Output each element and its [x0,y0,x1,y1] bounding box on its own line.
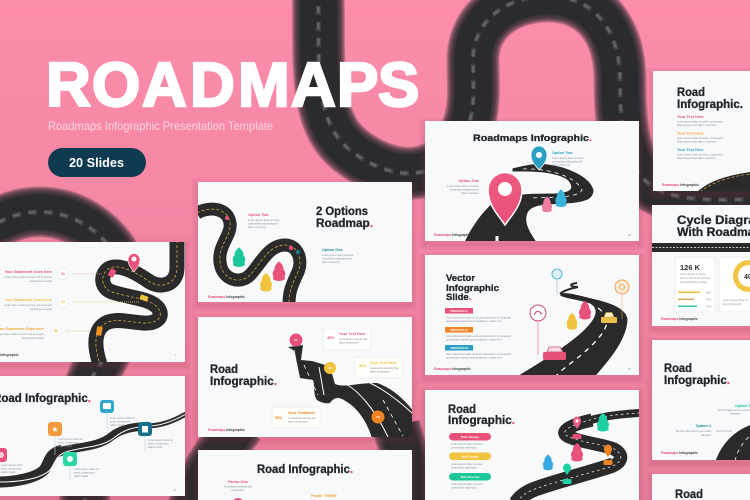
pill captions [451,442,483,490]
soft road: main winding road [318,0,750,200]
pill captions: consectetur adipiscing [451,486,477,490]
text items: adipiscing elit sed diam nonummy [677,156,717,160]
page number: 14 [173,488,176,492]
text items: Lorem ipsum dolor sit amet, consectetur [677,152,723,156]
title: Infographic. [677,99,743,111]
callout 45% pink: 45% [327,336,335,340]
statement 01 [4,270,52,283]
option 4: For the page dummy text used [676,429,712,433]
title [677,87,743,111]
title: 2 Options Roadmap: Roadmap. [316,218,373,230]
pill captions: Lorem ipsum dolor sit amet, [451,462,483,466]
donut card [719,257,750,312]
title: 2 Options Roadmap [316,206,373,230]
option one text: Lorem ipsum dolor sit amet, [447,184,479,188]
callout 50% yellow: A wonderful serenity has [370,366,399,370]
callout lines and text: adipis ingelit [58,444,73,448]
cars [543,312,617,360]
callout 65% orange [272,407,320,428]
option two text: consectetur adipiscing elit [248,222,278,226]
panel: Roadmaps Infographic pins slide [425,121,639,242]
title: Road [664,363,692,375]
connector [716,430,732,432]
pills: Web Design [461,454,479,458]
title: Vector [446,273,475,284]
text items: adipiscing elit sed diam nonummy [677,139,717,143]
title [448,404,515,427]
option two text [552,151,584,167]
road strip [652,243,750,252]
trees [542,190,567,212]
road: perspective [517,283,628,376]
icon: smile ring [552,269,562,294]
option two text: consectetur adipiscing elit [552,160,582,164]
option one text [322,248,354,264]
option one text: consectetur adipiscing elit [322,256,352,260]
callout 65% orange: Your Textliners [288,411,315,415]
title [446,273,499,303]
footer: Roadmaps Infographic [434,367,471,371]
stat card: 126 K [680,263,701,272]
number badges: 02 [61,300,65,304]
panel: right Road Infographic slide [653,71,750,192]
callout lines and text: Lorem ipsum dolor [1,463,23,467]
statement 01: Lorem ipsum dolor sit amet. Ius te tempor [4,275,52,279]
stat card [675,257,715,312]
option one text: Option One [458,179,479,183]
page number: 7 [175,353,177,357]
pill captions: consectetur adipiscing [451,466,477,470]
process tags: PROCESS 01 [450,309,468,313]
stat card: 80% [706,290,712,294]
pill captions: Lorem ipsum dolor sit amet, [451,442,483,446]
title: Infographic. [448,415,515,427]
milestones: 01 [294,338,298,342]
pills [449,433,491,480]
option two text: Lorem ipsum dolor sit amet, [248,218,280,222]
stat card: 75% [706,304,712,308]
title: Road Infographic: Infographic. [210,376,277,388]
title: Road [448,404,476,416]
factor one: possession [232,488,245,492]
text items: Your Text Here [677,148,703,152]
trees [567,301,591,330]
pin: option two [531,146,547,170]
option two text: diam nonummy [248,225,266,229]
process tags: Get a document made since into document. In consectet [446,352,511,356]
title: Infographic. [664,375,730,387]
option two text [248,213,280,229]
option one text: Option One [322,248,343,252]
option 3: standard [730,412,741,416]
text items: Your Text Here [677,115,703,119]
statement 02: Lorem ipsum dolor sit amet. Ius te tempor [4,303,52,307]
option one text [447,179,480,195]
donut card: Lorem ipsum dolor sit [723,298,748,302]
pin [128,254,140,272]
callout 50% yellow: 50% [359,364,367,368]
panel: right Road Infographic options slide [652,340,750,461]
title: Slide. [446,292,471,303]
title: Road [677,87,705,99]
statement 02 [4,298,52,311]
callout lines and text: adipis ingelit [148,445,163,449]
trees [543,413,609,470]
icon: gear ring [615,280,629,319]
callout 65% orange: taken possession [288,420,309,424]
number badges [50,268,68,336]
callout 50% yellow: taken possession [370,370,391,374]
soft road: lower left [0,212,118,500]
panel: statements road slide [0,240,185,364]
pills: Print Design [461,435,479,439]
panel: bottom right Road slide [652,474,750,500]
subtitle: Roadmaps Infographic Presentation Template [48,119,273,133]
option 3 [718,404,750,416]
callout lines and text: Lorem ipsum dolor sit [58,437,83,441]
callout lines and text: amet, consectetur [1,466,22,470]
panel: 2 Options Roadmap slide [197,182,412,304]
trees [233,248,285,292]
title: Roadmaps Infographic . [473,133,592,144]
road: perspective with pins [464,163,594,242]
option two text: diam nonummy [552,163,570,167]
option 3: Option 3 [735,404,750,408]
pill captions: consectetur adipiscing [451,446,477,450]
text items: Your Text Here [677,132,703,136]
callout lines and text: amet, consectetur [110,420,131,424]
icon tiles: ★ [51,425,59,434]
option 4: Option 4 [696,424,712,428]
number badges: 03 [54,329,58,333]
title [664,363,730,387]
statement 02: admodi per suscipit [30,307,52,311]
callout lines and text: amet, consectetur [74,470,95,474]
option one text: consectetur adipiscing elit [449,188,479,192]
option two text: Option Two [552,151,573,155]
panel: Road Infographic pills slide [425,390,640,500]
panel: Cycle Diagram slide [652,205,750,326]
callout lines and text [1,413,173,481]
option one text: Lorem ipsum dolor sit amet, [322,253,354,257]
process tags: PROCESS 02 [450,328,468,332]
road: perspective rising [288,345,414,438]
option one text: diam nonummy [461,191,480,195]
text items [677,115,723,160]
factor one: Factor One [228,480,248,484]
callout 45% pink: taken possession [339,340,360,344]
milestones: 02 [328,366,332,370]
panel: Road Infographic mountain road slide [198,317,414,438]
dotted connectors [66,274,140,331]
stat card: 70% [706,298,712,302]
panel: Vector Infographic slide [425,255,639,376]
road [715,424,750,461]
callout lines and text: amet, consectetur [58,440,79,444]
icon: headphones ring [530,305,546,355]
road [516,413,640,500]
milestones [290,334,384,424]
option one text: diam nonummy [322,260,340,264]
text items: Lorem ipsum dolor sit amet, consectetur [677,136,723,140]
panel: Road Infographic factors slide [198,450,412,500]
statement 01: admodi per suscipit [30,279,52,283]
icon tiles [0,400,152,466]
text items: Lorem ipsum dolor sit amet, consectetur [677,120,723,124]
page number: 12 [628,367,631,371]
stat card: and typesetting industry [680,280,708,284]
option 4 [676,424,712,437]
process tags: accusantium doloremque laudantium, totam rem [446,356,502,360]
callout 65% orange: 65% [275,416,283,420]
process tags: Get a document made since into document. In consectet [446,334,511,338]
pin: option one [488,172,522,225]
road [697,172,750,192]
callout lines and text: adipis ingelit [110,423,125,427]
process tags: accusantium doloremque laudantium, totam rem [446,319,502,323]
callout 45% pink: Your Text Here [339,332,365,336]
stat card: Lorem ipsum is simply [680,272,706,276]
road [96,240,177,364]
text items: adipiscing elit sed diam nonummy [677,123,717,127]
option two text: Lorem ipsum dolor sit amet, [552,156,584,160]
title [677,215,750,239]
badge: 20 Slides: 20 Slides [69,156,124,170]
callout lines and text: Lorem ipsum dolor sit [110,416,135,420]
milestones: 03 [376,415,380,419]
footer: Roadmaps Infographic [661,317,698,321]
footer: Roadmaps Infographic [434,233,471,237]
title: Infographic [446,283,499,294]
process tags: Get a document made since into document. In consectet [446,316,511,320]
footer: Roadmaps Infographic [661,451,698,455]
callout 45% pink [323,328,371,350]
callout lines and text: Lorem ipsum dolor sit [74,467,99,471]
cars [96,268,149,336]
statement 03: admodi per suscipit [22,336,44,340]
process tags: PROCESS 03 [450,346,468,350]
callout lines and text: adipis ingelit [74,474,89,478]
title: Road Infographic [210,364,277,388]
stat card: dummy text of the printing [680,276,710,280]
footer: Roadmaps Infographic [208,295,245,299]
title: Road Infographic: Road [210,364,238,376]
markers [225,216,300,254]
panel: road infographic with icons slide [0,376,186,496]
badge: 20 Slides [48,148,146,177]
factor one [224,480,253,492]
title: ROADMAPS: ROADMAPS [46,51,419,120]
title: Road Infographic. [257,464,353,476]
donut card: the printing and [723,302,741,306]
statement 01: Your Statement Goes here [5,270,52,274]
page number: 10 [628,233,631,237]
factor three: Factor THREE [311,494,337,498]
factor one: A wonderful serenity has [224,484,253,488]
statement 03 [0,327,44,340]
footer: Roadmaps Infographic [662,183,699,187]
process tags: accusantium doloremque laudantium, totam rem [446,338,502,342]
callout 50% yellow [355,357,402,378]
statement 02: Your Statement Goes here [5,298,52,302]
process tags [445,308,511,360]
road: winding [197,209,300,304]
option two text: Option Two [248,213,269,217]
number badges: 01 [61,272,65,276]
option 4: standard [701,433,712,437]
callout 65% orange: A wonderful serenity has [288,416,317,420]
pill captions: Lorem ipsum dolor sit amet, [451,482,483,486]
title: 2 Options Roadmap: 2 Options [316,206,368,218]
callout lines and text: adipis ingelit [1,470,16,474]
callout 45% pink: A wonderful serenity has [339,337,368,341]
soft road: lower centre [192,425,412,500]
callout 50% yellow: Your Text Here [370,361,396,365]
pins and cars [562,416,612,484]
road: thin winding [0,414,186,482]
pills: Web Develop [461,475,480,479]
marker [232,498,244,500]
callout lines and text: amet, consectetur [148,442,169,446]
footer: Roadmaps Infographic [208,428,245,432]
callout lines and text: Lorem ipsum dolor sit [148,438,173,442]
